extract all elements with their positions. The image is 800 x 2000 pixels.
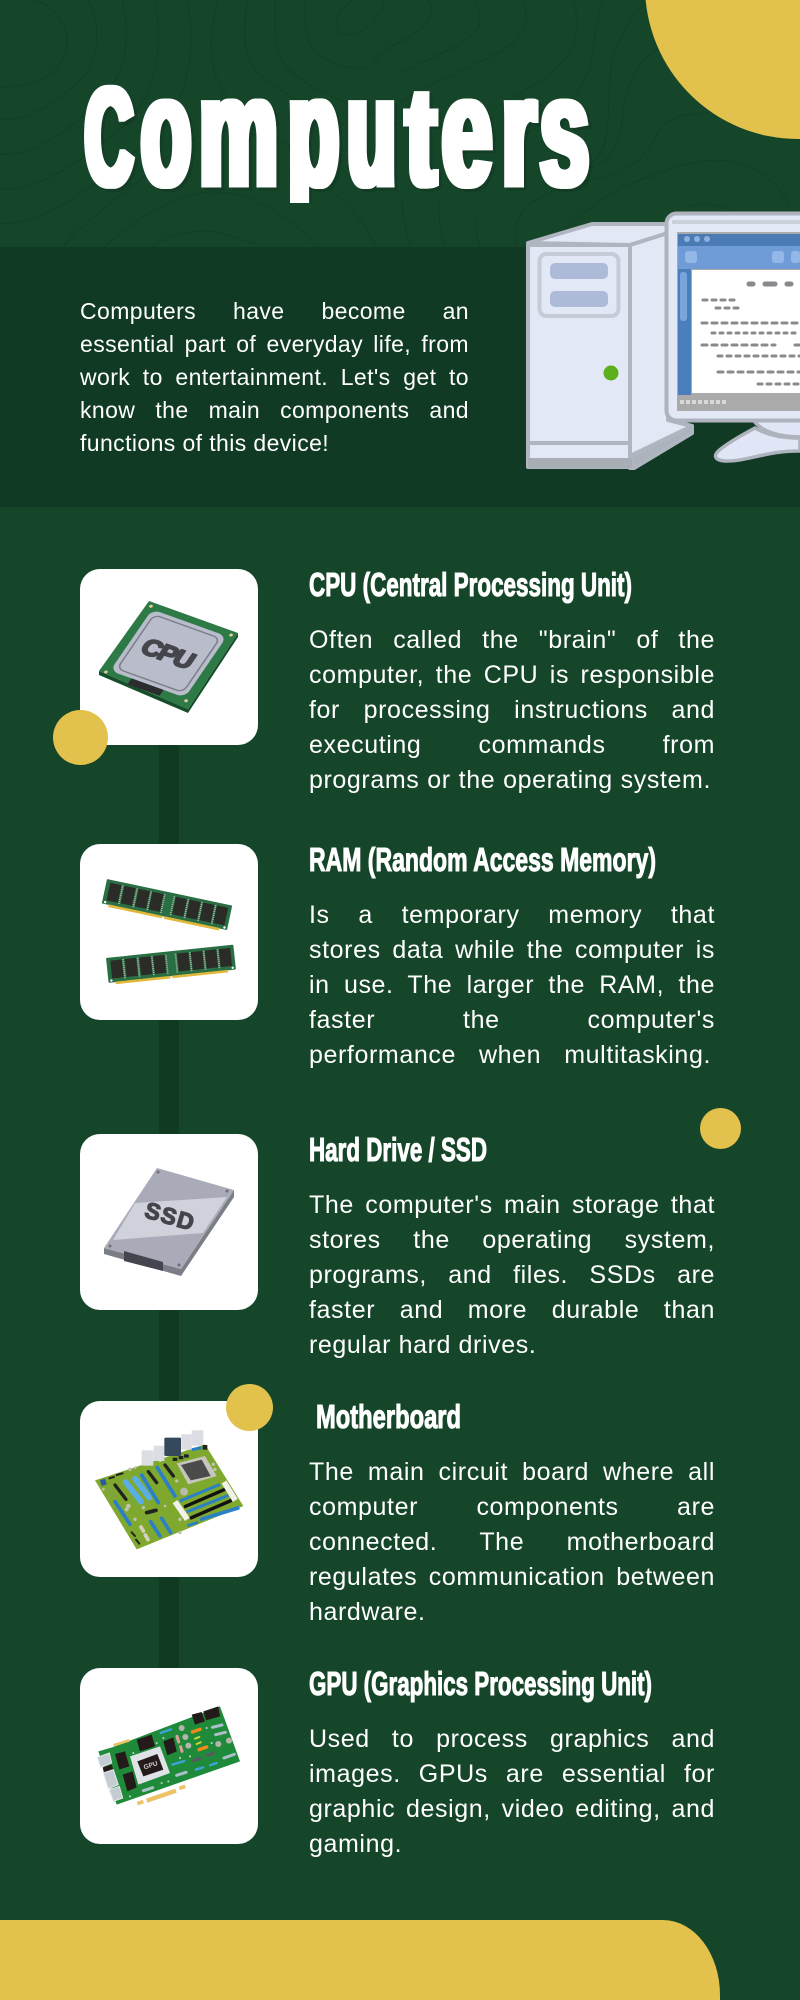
text: CPU description: executing commands from bbox=[309, 731, 715, 759]
heading: SSD: Hard Drive / SSD bbox=[309, 1131, 487, 1168]
card: CPU illustration: CPU bbox=[135, 634, 200, 675]
heading: CPU: CPU (Central Processing Unit) bbox=[309, 566, 632, 603]
intro text bbox=[80, 298, 469, 456]
card: motherboard illustration bbox=[80, 1401, 258, 1577]
text: CPU description: for processing instructions and bbox=[309, 696, 715, 724]
decorative yellow dot right bbox=[700, 1108, 741, 1149]
intro text: Computers have become an bbox=[80, 298, 469, 324]
text: SSD description: The computer's main storage that bbox=[309, 1191, 715, 1219]
tower bbox=[528, 224, 692, 468]
card: RAM illustration bbox=[80, 844, 258, 1020]
monitor stand bbox=[716, 418, 800, 461]
text: SSD description: regular hard drives. bbox=[309, 1331, 536, 1359]
text: SSD description: faster and more durable than bbox=[309, 1296, 715, 1324]
intro text: functions of this device! bbox=[80, 430, 329, 456]
section: Motherboard bbox=[80, 1398, 715, 1626]
card: CPU illustration bbox=[80, 569, 258, 745]
heading: Motherboard: Motherboard bbox=[316, 1398, 461, 1435]
text: GPU description: gaming. bbox=[309, 1830, 402, 1858]
decorative yellow circle top right bbox=[645, 0, 800, 139]
text: SSD description bbox=[309, 1191, 715, 1359]
decorative yellow dot on motherboard card bbox=[226, 1384, 273, 1431]
section: RAM bbox=[80, 841, 715, 1069]
text: RAM description: faster the computer's bbox=[309, 1006, 715, 1034]
text: SSD description: programs, and files. SSDs are bbox=[309, 1261, 715, 1289]
card: SSD illustration: SSD bbox=[142, 1197, 197, 1235]
heading: RAM: RAM (Random Access Memory) bbox=[309, 841, 656, 878]
intro text: work to entertainment. Let's get to bbox=[80, 364, 469, 390]
text: RAM description: stores data while the computer is bbox=[309, 936, 715, 964]
section: SSD bbox=[80, 1131, 715, 1359]
text: motherboard description: connected. The motherboard bbox=[309, 1528, 715, 1556]
text: motherboard description: hardware. bbox=[309, 1598, 426, 1626]
connector line between cards bbox=[159, 745, 179, 1675]
intro text: know the main components and bbox=[80, 397, 469, 423]
intro text: essential part of everyday life, from bbox=[80, 331, 469, 357]
text: motherboard description: regulates communication between bbox=[309, 1563, 715, 1591]
card: GPU illustration bbox=[80, 1668, 258, 1844]
text: CPU description: computer, the CPU is responsible bbox=[309, 661, 715, 689]
text: motherboard description: computer components are bbox=[309, 1493, 715, 1521]
text: CPU description: Often called the "brain" of the bbox=[309, 626, 715, 654]
illustration: desktop computer bbox=[526, 212, 800, 470]
text: GPU description: images. GPUs are essential for bbox=[309, 1760, 715, 1788]
card: GPU illustration: GPU bbox=[143, 1760, 159, 1771]
heading: GPU: GPU (Graphics Processing Unit) bbox=[309, 1665, 652, 1702]
text: motherboard description bbox=[309, 1458, 715, 1626]
footer yellow bar bbox=[0, 1920, 720, 2000]
text: motherboard description: The main circuit board where all bbox=[309, 1458, 715, 1486]
monitor bbox=[666, 214, 800, 420]
text: SSD description: stores the operating system, bbox=[309, 1226, 715, 1254]
card: SSD illustration bbox=[80, 1134, 258, 1310]
section: CPU bbox=[80, 566, 715, 794]
text: RAM description: in use. The larger the RAM, the bbox=[309, 971, 715, 999]
text: GPU description: Used to process graphics and bbox=[309, 1725, 715, 1753]
text: CPU description bbox=[309, 626, 715, 794]
text: GPU description bbox=[309, 1725, 715, 1858]
text: RAM description: performance when multitasking. bbox=[309, 1041, 711, 1069]
text: RAM description bbox=[309, 901, 715, 1069]
title bbox=[84, 60, 592, 203]
text: GPU description: graphic design, video editing, and bbox=[309, 1795, 715, 1823]
text: RAM description: Is a temporary memory that bbox=[309, 901, 715, 929]
text: CPU description: programs or the operating system. bbox=[309, 766, 711, 794]
decorative yellow dot on CPU card bbox=[53, 710, 108, 765]
intro band bbox=[0, 247, 800, 507]
section: GPU bbox=[80, 1665, 715, 1858]
